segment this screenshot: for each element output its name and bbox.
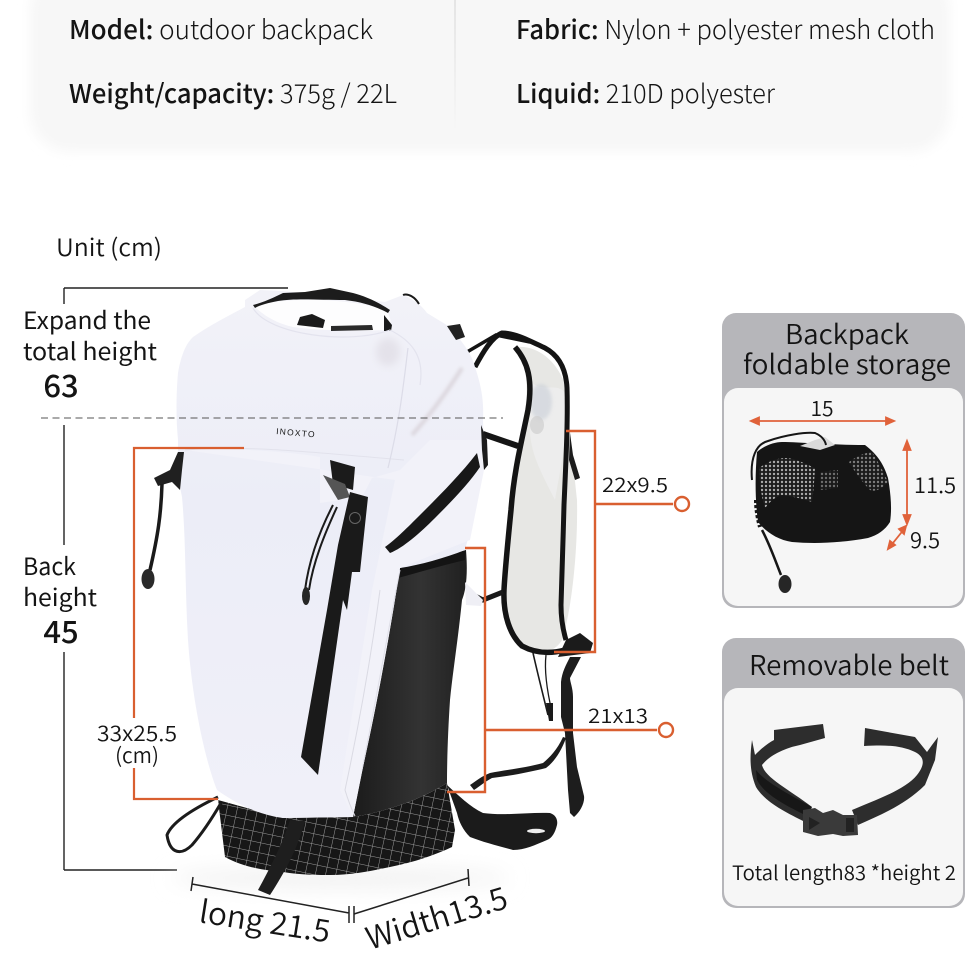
panel: specifications — [30, 0, 950, 152]
belt caption: Total length83 *height 2 — [732, 857, 956, 886]
dark side pocket — [353, 550, 467, 817]
storage heading: Backpack — [785, 313, 909, 352]
height dimension: expand the total height — [23, 288, 288, 406]
outer black edge — [475, 333, 567, 640]
panel: foldable storage: foldable storage — [743, 343, 951, 382]
side pocket callout: 21x13 — [588, 700, 648, 729]
front pocket callout: (cm) — [115, 740, 159, 770]
front pocket callout: 33x25.5 — [97, 718, 177, 748]
height dimension: back height: Back — [23, 547, 76, 582]
height dimension: back height: 45 — [43, 607, 79, 652]
height dimension: back height — [23, 425, 177, 870]
unit label: Unit (cm) — [56, 228, 162, 263]
front pocket callout — [96, 448, 244, 799]
spec: fabric: Fabric: Nylon + polyester mesh cloth — [516, 10, 935, 47]
width dimension: Width13.5 — [359, 873, 512, 959]
roll top opening — [254, 300, 391, 331]
panel: foldable storage — [722, 313, 965, 608]
spec: weight and capacity: Weight/capacity: 375g / 22L — [69, 74, 397, 111]
brand mark: INOXTO — [276, 426, 316, 439]
icon: belt with buckle — [751, 724, 938, 836]
shoulder harness — [467, 333, 593, 817]
main white body — [176, 290, 483, 818]
left cord and toggle — [142, 452, 184, 589]
height dimension: back height: height — [23, 578, 97, 613]
spec: liquid: Liquid: 210D polyester — [516, 74, 776, 111]
panel: foldable storage: 11.5 — [914, 468, 956, 500]
total height dashed line — [41, 417, 503, 419]
panel: foldable storage: 9.5 — [910, 523, 940, 555]
side compression strap — [385, 453, 480, 553]
shoulder pocket callout — [554, 431, 689, 652]
length dimension: long 21.5 — [197, 886, 334, 952]
shoulder pocket callout: 22x9.5 — [602, 469, 668, 498]
arrows: storage dimensions — [751, 418, 910, 549]
height dimension: expand the total height: total height — [23, 332, 157, 367]
spec: model: Model: outdoor backpack — [69, 10, 373, 47]
backpack illustration — [142, 288, 593, 895]
height dimension: expand the total height: 63 — [43, 361, 79, 406]
hanging straps — [561, 657, 584, 817]
bottom straps — [167, 797, 221, 852]
mesh base — [218, 783, 455, 875]
body highlights — [185, 440, 484, 817]
storage labels: 15 — [810, 393, 834, 423]
panel: removable belt — [722, 638, 965, 908]
front black strap — [301, 460, 368, 775]
icon: folded bag — [752, 433, 891, 593]
belt heading: Removable belt — [749, 644, 949, 683]
side pocket callout — [447, 548, 673, 792]
height dimension: expand the total height: Expand the — [23, 301, 151, 336]
inner black edge — [504, 347, 565, 652]
